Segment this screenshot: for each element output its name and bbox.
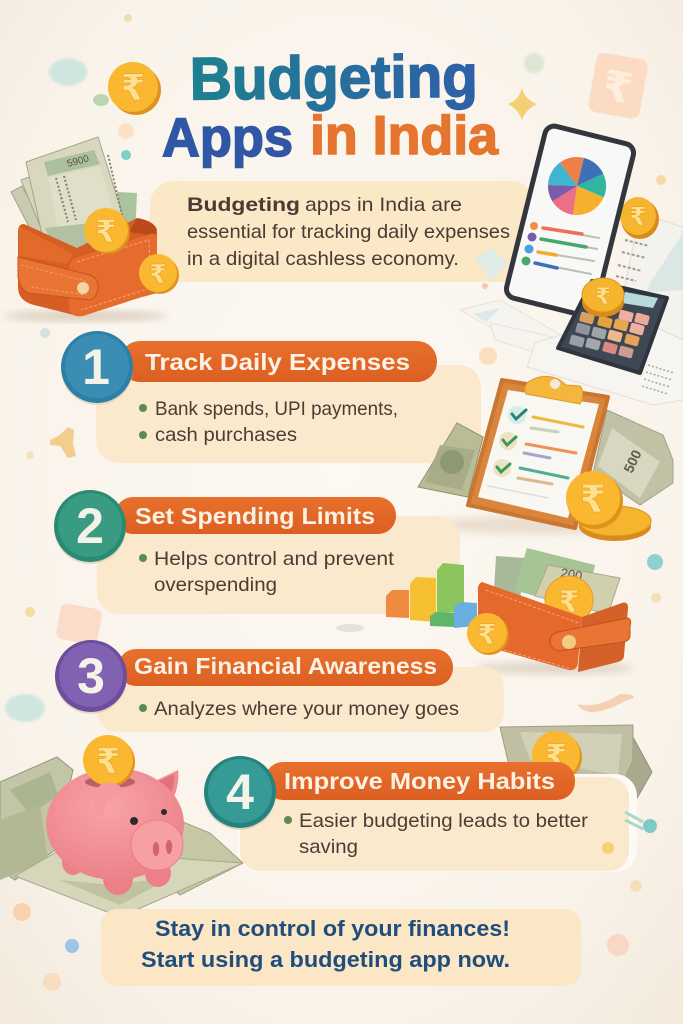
icon: rupee coin top xyxy=(93,62,161,115)
title xyxy=(162,42,498,168)
step 2 badge xyxy=(54,490,126,564)
illustration: receipts xyxy=(460,213,683,405)
coins xyxy=(566,471,651,541)
intro text: essential for tracking daily expenses xyxy=(187,221,510,243)
illustration: wallet with notes: 5900 xyxy=(66,153,91,170)
illustration: wallet with notes: ₹ xyxy=(95,214,117,249)
piggy body xyxy=(46,735,184,895)
step 1 bullets: cash purchases xyxy=(155,424,297,446)
checklist items xyxy=(488,406,583,498)
illustration: checklist clipboard with notes and coins xyxy=(418,376,673,541)
illustration: calculator xyxy=(558,281,667,373)
step 1 bullets xyxy=(139,398,398,446)
illustration: notes behind step 4 xyxy=(500,725,652,798)
step 4 heading: Improve Money Habits xyxy=(284,768,555,794)
step 4 badge: 4 xyxy=(226,764,254,820)
illustration: wallet with notes: ₹ xyxy=(149,259,167,289)
icon: teal brush mark xyxy=(625,812,657,833)
title line 1: Budgeting xyxy=(189,42,478,113)
icon: rupee coin top: ₹ xyxy=(120,67,146,108)
step 3 badge xyxy=(55,640,127,714)
step 4 badge xyxy=(204,756,276,830)
piggy coin: ₹ xyxy=(96,742,120,781)
title line 2: in India xyxy=(310,104,498,166)
step 1 pill xyxy=(120,341,437,382)
step 4 bullets xyxy=(284,810,589,858)
illustration: wallet with notes and coins: ₹ xyxy=(559,586,579,619)
panel: step 4 xyxy=(204,756,637,872)
intro text: Budgeting xyxy=(187,194,300,216)
icon: rupee tile: ₹ xyxy=(599,61,636,113)
step 4 pill xyxy=(265,762,575,800)
wallet back xyxy=(18,218,157,315)
step 3 heading: Gain Financial Awareness xyxy=(134,653,437,679)
piggy coin xyxy=(83,735,135,787)
title line 2 xyxy=(162,104,498,168)
step 2 pill xyxy=(115,497,396,534)
step 2 bullets: overspending xyxy=(154,574,277,596)
step 4 bullets: saving xyxy=(299,836,358,858)
panel: call to action xyxy=(101,909,581,986)
step 3 pill xyxy=(118,649,453,686)
step 4 bullets: Easier budgeting leads to better xyxy=(299,810,589,832)
icon: rupee tile xyxy=(587,52,649,120)
call to action text: Stay in control of your finances! xyxy=(155,916,510,941)
pie chart xyxy=(548,157,606,215)
icon: coin behind phone xyxy=(620,197,659,239)
icon: coin behind phone: ₹ xyxy=(629,203,647,231)
panel: step 3 xyxy=(55,640,504,732)
expense bars xyxy=(522,222,599,274)
illustration: wallet with notes and coins xyxy=(467,548,635,674)
wallet body xyxy=(578,603,628,672)
step 3 bullet: Analyzes where your money goes xyxy=(154,698,459,720)
step 1 badge: 1 xyxy=(82,339,110,395)
clipboard xyxy=(468,376,608,528)
icon: sparkle xyxy=(508,88,537,120)
icon: coin on calculator: ₹ xyxy=(595,283,611,309)
illustration: phone with pie chart xyxy=(501,121,639,321)
step 1 badge xyxy=(61,331,133,405)
step 2 bullets xyxy=(139,548,395,596)
wallet strap xyxy=(18,257,98,300)
wallet coins xyxy=(86,210,130,254)
call to action text: Start using a budgeting app now. xyxy=(141,947,510,972)
illustration: wallet with notes xyxy=(3,137,179,321)
step 2 bullets: Helps control and prevent xyxy=(154,548,395,570)
icon: coin on calculator xyxy=(582,278,624,317)
title line 2: Apps xyxy=(162,106,293,168)
panel: intro xyxy=(150,181,535,282)
illustration: piggy bank on notes xyxy=(0,735,243,917)
illustration: notes behind step 4: ₹ xyxy=(545,738,567,774)
intro text: in a digital cashless economy. xyxy=(187,248,459,270)
illustration: wallet with notes and coins: ₹ xyxy=(477,619,497,650)
coins: ₹ xyxy=(580,479,606,521)
illustration: bar blocks xyxy=(386,563,477,628)
step 1 heading: Track Daily Expenses xyxy=(145,349,410,375)
illustration: checklist clipboard with notes and coins: 500 xyxy=(620,447,645,475)
intro text: apps in India are xyxy=(305,194,462,216)
illustration: wallet with notes and coins: 200 xyxy=(559,565,583,584)
step 1 bullets: Bank spends, UPI payments, xyxy=(155,398,398,420)
wallet flap xyxy=(69,234,157,316)
panel: step 1 xyxy=(61,331,481,463)
step 2 heading: Set Spending Limits xyxy=(135,503,375,529)
panel: step 2 xyxy=(54,490,460,614)
step 3 badge: 3 xyxy=(77,648,105,704)
step 2 badge: 2 xyxy=(76,498,104,554)
